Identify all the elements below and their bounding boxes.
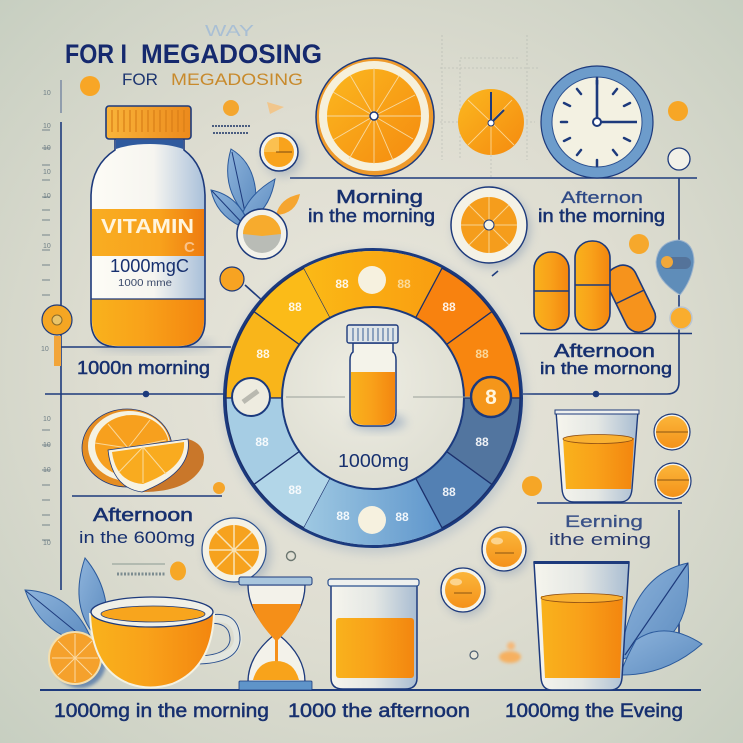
segment glyphs: 88 [395,510,409,524]
segment glyphs: 88 [442,300,456,314]
faint guide lines [440,35,540,178]
segment glyphs: 88 [442,485,456,499]
faded sparks [470,640,521,676]
evening label: ithe eming [549,530,651,549]
afternoon label left: in the 600mg [79,528,195,547]
afternoon label top right [538,188,665,226]
dosing wheel [223,248,527,554]
bottom labels: 1000 the afternoon [288,701,470,722]
centre glass [328,579,419,689]
evening label: Eerning [565,512,643,531]
ruler ticks: 10 [43,540,51,547]
juice glass upper right [555,410,639,502]
small ring [286,552,296,560]
blue pin icon [656,240,694,295]
1000 morning label left: 1000n morning [77,358,210,378]
right top markers [668,101,692,329]
small orange dots and notes, top left [80,76,284,133]
bottom labels [54,701,683,722]
wheel markers [358,266,386,294]
pill lower [441,568,488,616]
ruler ticks [41,90,51,547]
segment glyphs: 88 [288,300,302,314]
ruler ticks: 10 [43,442,51,449]
subtitle: FOR [122,71,158,89]
segment glyphs: 88 [256,347,270,361]
segment glyphs: 88 [397,277,411,291]
morning label: Morning [336,187,423,207]
title [65,23,322,89]
capsule two [575,241,610,330]
afternoon label top right: in the morning [538,206,665,226]
subtitle orange word: MEGADOSING [171,71,303,89]
afternoon label right: in the mornong [540,359,672,378]
pills beside upper glass [522,414,691,499]
hourglass [239,577,312,690]
main heading word: MEGADOSING [141,39,322,69]
ruler ticks: 10 [43,123,51,130]
large orange slice [316,58,434,176]
note with dot [112,562,186,580]
small orange bead [220,267,244,291]
segment glyphs: 88 [475,347,489,361]
small orange wheel [202,518,271,587]
left medallion [42,305,72,366]
large juice glass [534,561,629,690]
vitamin C bottle: 1000mgC [110,256,189,276]
afternoon label left: Afternoon [93,505,193,525]
teacup [90,597,240,688]
wedge [108,439,204,492]
ruler ticks: 10 [43,467,51,474]
afternoon label right [540,341,672,378]
morning label [308,187,435,226]
afternoon label right: Afternoon [554,341,655,361]
capsules [534,234,660,337]
orange pills centre right [441,527,529,616]
bottom labels: 1000mg the Eveing [505,701,683,722]
segment glyphs: 88 [336,509,350,523]
leaves behind cup [25,558,107,640]
blue leaves with gauge [211,149,300,259]
capsule one [534,252,569,330]
morning label: in the morning [308,206,435,226]
evening label [549,512,651,549]
wall clock [541,66,653,178]
kicker: WAY [205,23,254,40]
dosing wheel: 8 [485,386,497,409]
blue leaves right [620,563,702,675]
pill icon [260,133,302,176]
bottle label text: VITAMIN [101,216,194,238]
ruler ticks: 10 [41,346,49,353]
segment glyphs: 88 [475,435,489,449]
vitamin C bottle: 1000 mme [118,278,172,289]
afternoon label left [79,505,195,547]
pill upper [482,527,529,575]
bottom labels: 1000mg in the morning [54,701,269,722]
ruler ticks: 10 [43,243,51,250]
vitamin C bottle [91,106,215,351]
centre bottle [347,325,406,430]
main heading: FOR I [65,39,127,69]
orange clock [458,89,524,155]
ruler ticks: 10 [43,90,51,97]
ruler ticks: 10 [43,169,51,176]
segment glyphs [255,277,489,524]
centre dose: 1000mg [338,451,409,471]
small dot [213,482,225,494]
segment glyphs: 88 [288,483,302,497]
morning segments [226,251,520,398]
orange half and wedge [82,409,204,492]
connector lines [40,80,701,690]
vitamin C bottle: C [184,239,195,256]
capsule three [602,260,660,337]
orange beside cup [49,632,106,688]
afternoon label top right: Afternon [561,188,643,207]
orange wheel badge [451,187,530,267]
evening segments [226,398,520,545]
ruler ticks: 10 [43,193,51,200]
ruler ticks: 10 [43,145,51,152]
whole half [82,409,172,487]
ruler ticks: 10 [43,416,51,423]
segment glyphs: 88 [255,435,269,449]
segment glyphs: 88 [335,277,349,291]
